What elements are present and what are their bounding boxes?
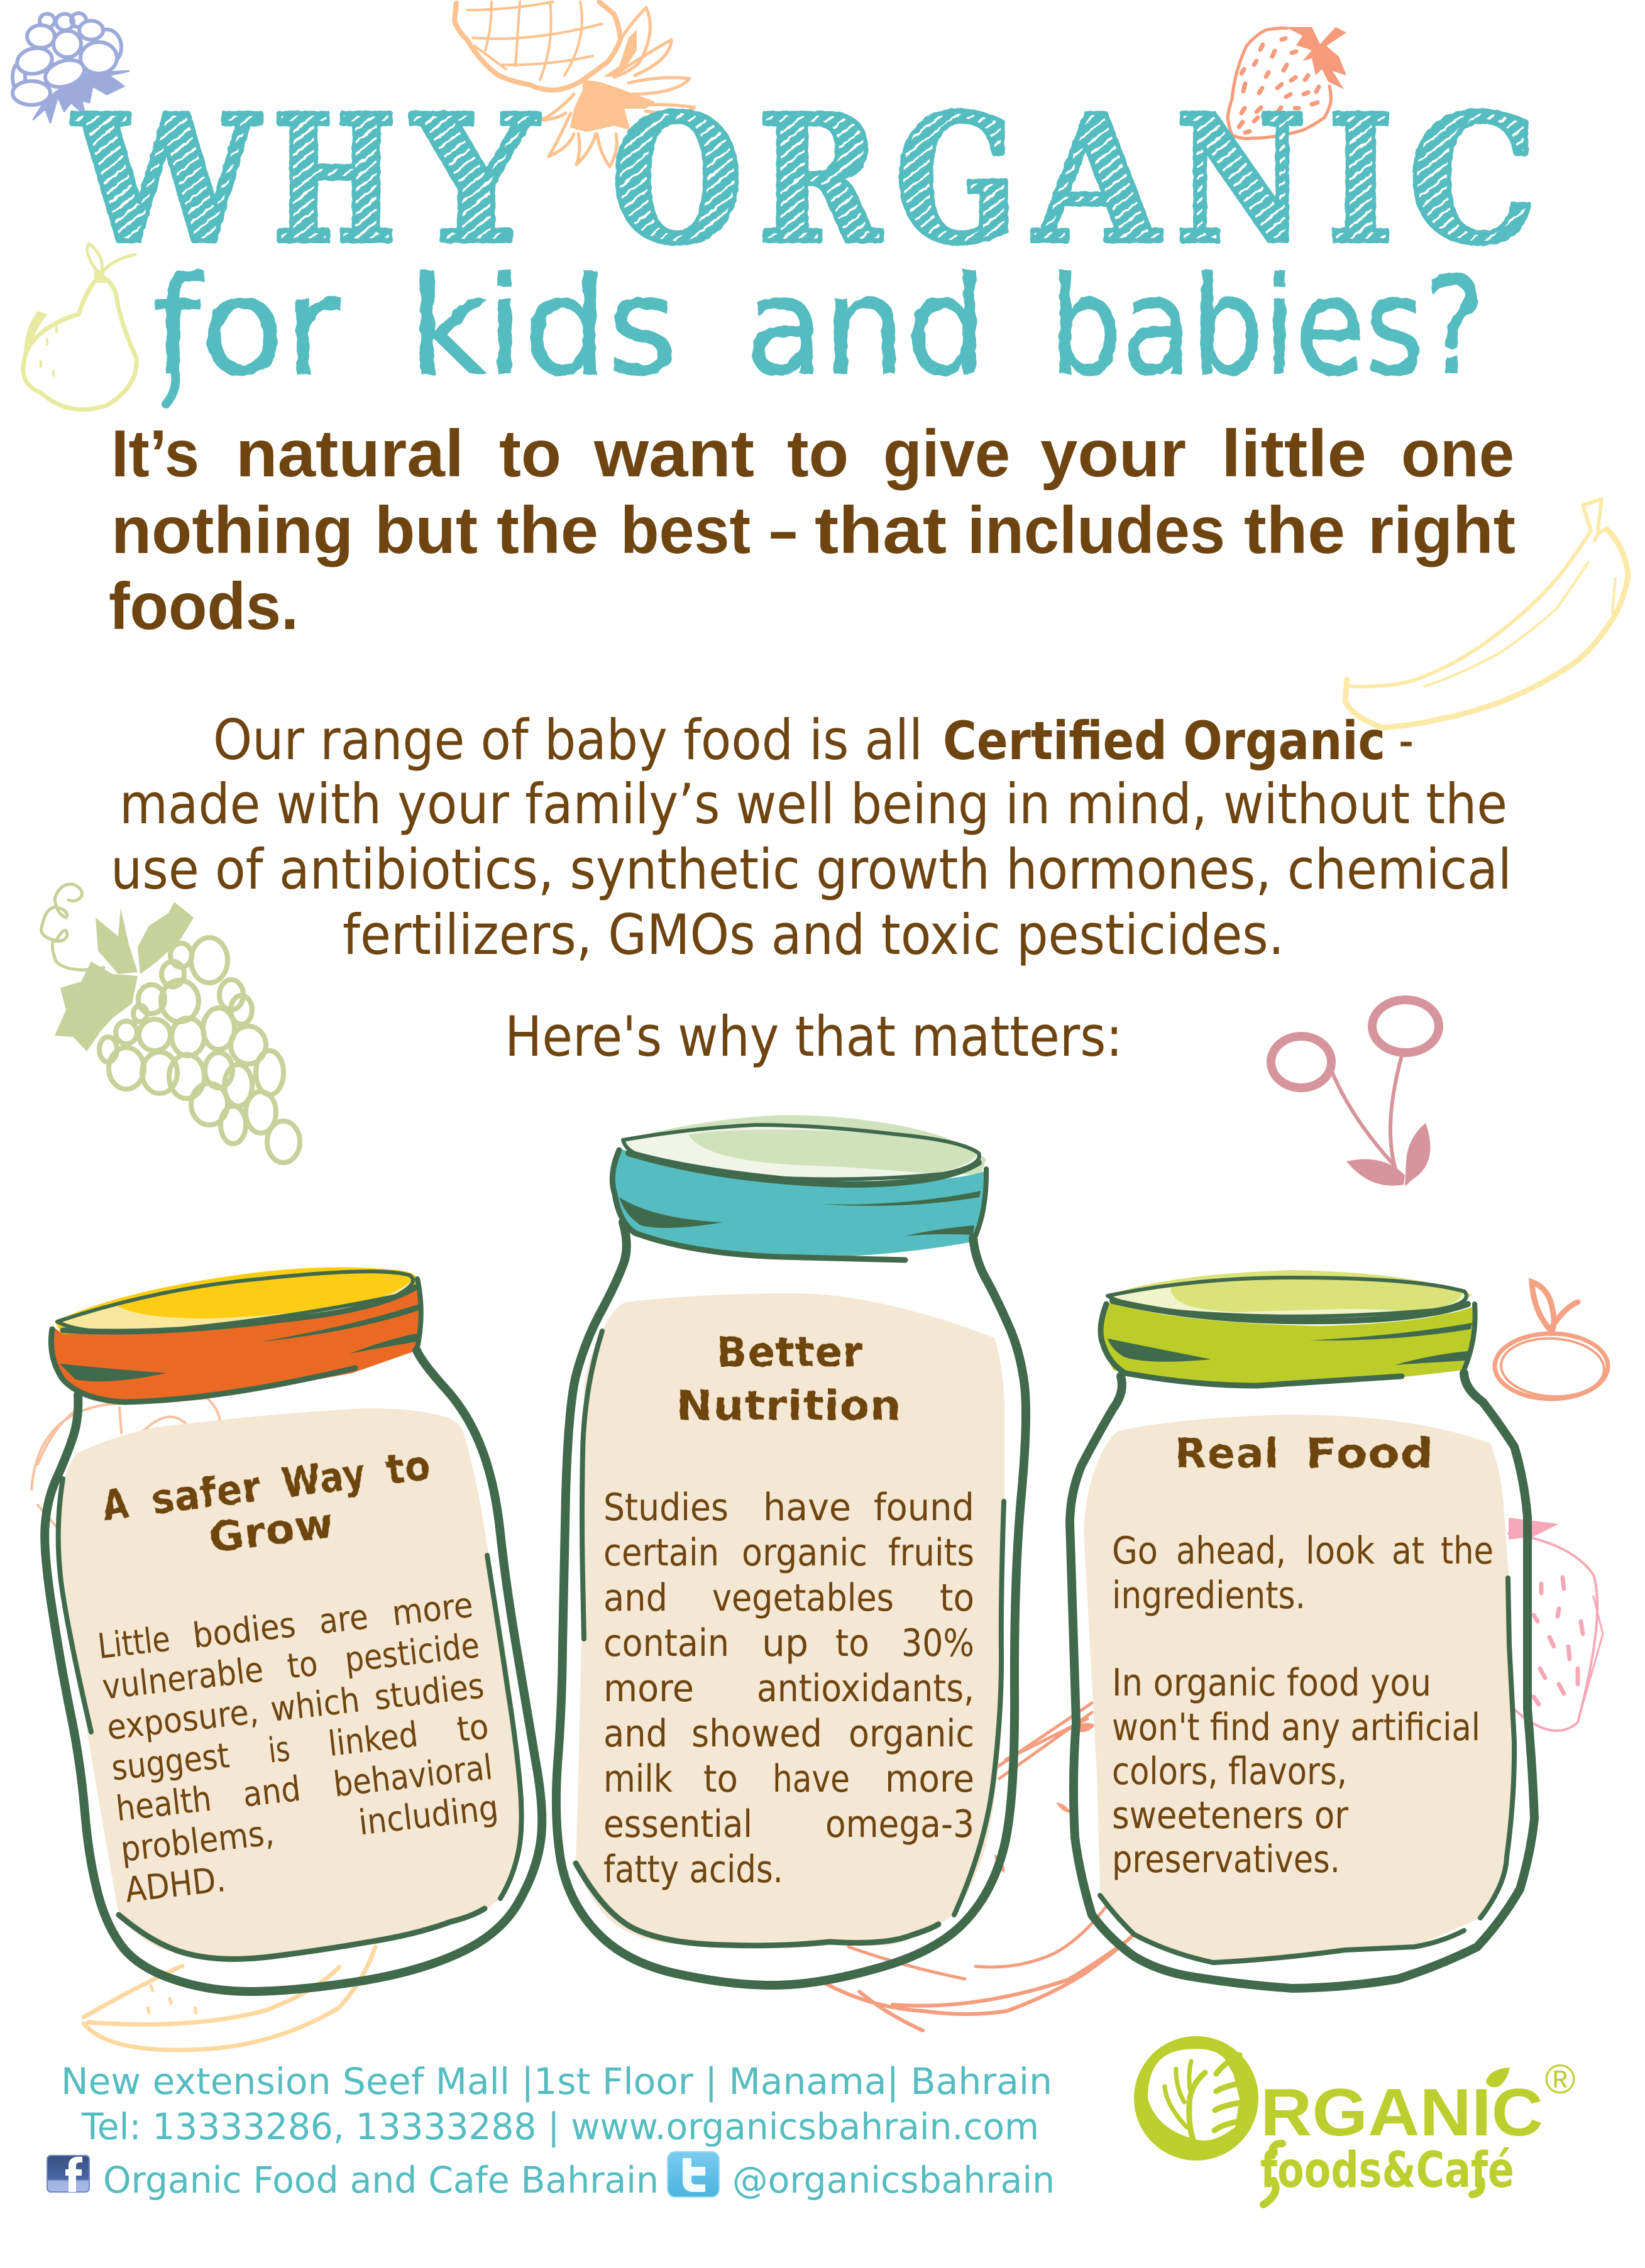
jar 2 body text: found bbox=[874, 1486, 974, 1530]
title: N bbox=[1175, 77, 1306, 282]
jar 1 body text: to bbox=[285, 1643, 320, 1687]
heading paragraph: want bbox=[593, 417, 754, 491]
jar 3 body text: at bbox=[1392, 1529, 1424, 1573]
jar 1 body text: studies bbox=[372, 1665, 486, 1717]
icon: orange bbox=[1495, 1282, 1608, 1399]
icon: grapes bbox=[41, 884, 300, 1163]
jar 2 body text: certain bbox=[603, 1531, 719, 1575]
jar 1 heading: safer bbox=[149, 1464, 264, 1524]
jar 1 body text: problems, bbox=[119, 1812, 276, 1870]
jar 1 body text: health bbox=[114, 1778, 213, 1829]
jar 2 body text: and bbox=[603, 1576, 668, 1620]
title: G bbox=[895, 77, 1018, 282]
intro paragraph bbox=[111, 708, 1512, 1069]
jar 2 body text: milk bbox=[603, 1757, 673, 1801]
heading paragraph: nothing bbox=[111, 493, 353, 567]
icon: facebook bbox=[47, 2156, 89, 2192]
jar 2 body text: to bbox=[940, 1576, 974, 1620]
jar 1 body text: pesticide bbox=[343, 1625, 481, 1680]
jar 2 body text: to bbox=[835, 1621, 869, 1665]
intro paragraph: made with your family’s well being in mind, without the bbox=[119, 772, 1507, 836]
jar 2 body text: 30% bbox=[901, 1621, 974, 1665]
jar 1 heading: A bbox=[100, 1480, 132, 1530]
jar 3 heading: Food bbox=[1306, 1430, 1434, 1477]
heading paragraph: right bbox=[1368, 493, 1516, 567]
jar 2 glass outline bbox=[556, 1222, 1026, 1985]
heading paragraph: includes bbox=[967, 493, 1225, 567]
icon: pear bbox=[23, 244, 136, 410]
heading paragraph: the bbox=[497, 493, 598, 567]
jar 2 body text: fatty acids. bbox=[603, 1848, 783, 1892]
jar 3 body text: sweeteners or bbox=[1112, 1794, 1348, 1838]
heading paragraph: foods. bbox=[109, 569, 299, 644]
jar 2 body text: showed bbox=[691, 1712, 822, 1756]
title: Y bbox=[410, 77, 541, 282]
footer contact text bbox=[61, 2060, 1055, 2201]
intro paragraph: - bbox=[1399, 708, 1414, 772]
jar 2 body text: contain bbox=[603, 1621, 729, 1665]
jar 1 heading: to bbox=[383, 1442, 434, 1494]
heading paragraph: to bbox=[499, 417, 561, 491]
jar 3 body text: colors, flavors, bbox=[1112, 1750, 1347, 1794]
jar 2 body text: organic bbox=[742, 1531, 867, 1575]
title: W bbox=[71, 77, 262, 282]
heading paragraph: little bbox=[1221, 417, 1367, 491]
jar 1 label panel bbox=[57, 1408, 520, 1963]
subtitle: kids bbox=[409, 248, 677, 405]
jar 3 body text: won't find any artificial bbox=[1112, 1706, 1480, 1750]
jar 3 body text: Go bbox=[1112, 1529, 1158, 1573]
jar 1 lid bbox=[51, 1267, 422, 1402]
jar 2: better nutrition bbox=[556, 1115, 1026, 1985]
jar 3 body text: preservatives. bbox=[1112, 1838, 1340, 1882]
title: H bbox=[273, 77, 397, 282]
jar 1 body text: suggest bbox=[109, 1735, 231, 1789]
heading paragraph: to bbox=[787, 417, 849, 491]
jar 1 heading bbox=[100, 1442, 439, 1575]
jar 1 body text: linked bbox=[326, 1714, 420, 1764]
jar 2 body text: organic bbox=[849, 1712, 974, 1756]
jar 1 body text: to bbox=[455, 1706, 490, 1750]
jar 1 body text: which bbox=[268, 1679, 361, 1729]
intro paragraph: fertilizers, GMOs and toxic pesticides. bbox=[343, 902, 1284, 967]
intro paragraph: Here's why that matters: bbox=[505, 1004, 1123, 1069]
jar 1 glass outline bbox=[45, 1350, 542, 1991]
jar 3 label panel bbox=[1084, 1415, 1514, 1963]
jar 2 body text: Studies bbox=[603, 1486, 729, 1530]
orange swirl between jars bbox=[817, 1703, 1134, 2030]
jar 1 body text: are bbox=[317, 1596, 370, 1641]
intro paragraph: Our range of baby food is all bbox=[213, 708, 923, 772]
jar 1 body text: bodies bbox=[190, 1604, 297, 1656]
title: R bbox=[757, 77, 883, 282]
jar 2 heading: Nutrition bbox=[676, 1383, 901, 1430]
heading paragraph: natural bbox=[236, 417, 464, 491]
jar 2 body text: antioxidants, bbox=[757, 1667, 974, 1711]
heading paragraph: that bbox=[815, 493, 947, 567]
heading paragraph: one bbox=[1401, 417, 1514, 491]
icon: banana bbox=[1345, 499, 1628, 728]
jar 2 lid bbox=[612, 1115, 986, 1260]
jar 2 body text: omega-3 bbox=[825, 1802, 974, 1846]
jar 2 label panel bbox=[576, 1293, 1004, 1946]
jar 2 heading bbox=[676, 1329, 901, 1430]
jar 1 heading: Grow bbox=[206, 1500, 337, 1562]
logo leaf bbox=[1486, 2068, 1510, 2087]
footer contact text: New extension Seef Mall |1st Floor | Manama| Bahrain bbox=[61, 2060, 1052, 2103]
logo tagline: foods&Café bbox=[1260, 2142, 1514, 2199]
fruit behind jar 1 bbox=[31, 1398, 220, 1527]
title: C bbox=[1408, 77, 1538, 282]
jar 3 body text: In organic food you bbox=[1112, 1661, 1431, 1705]
jar 1 heading: Way bbox=[279, 1450, 369, 1508]
footer contact text: Tel: 13333286, 13333288 | www.organicsbahrain.com bbox=[81, 2105, 1039, 2148]
jar 2 body text: fruits bbox=[888, 1531, 974, 1575]
heading paragraph: the bbox=[1244, 493, 1345, 567]
icon: blackberry bbox=[13, 13, 129, 123]
subtitle f tail bbox=[166, 371, 175, 404]
jar 2 body text: more bbox=[603, 1667, 694, 1711]
logo O with tree bbox=[1134, 2036, 1258, 2161]
icon: cherries bbox=[1271, 1000, 1439, 1186]
icon: strawberry top right bbox=[1228, 27, 1346, 138]
jar 2 body text: have bbox=[773, 1757, 850, 1801]
jar 2 heading: Better bbox=[717, 1329, 863, 1376]
heading paragraph: It’s bbox=[111, 417, 199, 491]
subtitle: babies? bbox=[1050, 248, 1485, 405]
subtitle: for bbox=[152, 248, 341, 405]
jar 1 body text: and bbox=[241, 1768, 303, 1815]
footer contact text: Organic Food and Cafe Bahrain bbox=[103, 2159, 659, 2201]
logo: Organic Foods & Cafe bbox=[1134, 2036, 1575, 2205]
jar 2 body text: vegetables bbox=[712, 1576, 894, 1620]
jar 3 body text: the bbox=[1441, 1529, 1494, 1573]
jar 2 body text: more bbox=[885, 1757, 974, 1801]
jar 1 body text: including bbox=[356, 1787, 500, 1843]
heading paragraph: give bbox=[883, 417, 1010, 491]
jar 3 lid bbox=[1100, 1270, 1475, 1386]
jar 1 body text: more bbox=[390, 1584, 475, 1633]
logo f tails bbox=[1263, 2144, 1482, 2205]
jar 1: a safer way to grow bbox=[45, 1267, 542, 1991]
logo registered mark: ® bbox=[1545, 2056, 1575, 2102]
jar 3: real food bbox=[1070, 1270, 1534, 1988]
heading paragraph bbox=[109, 417, 1516, 644]
jar 1 body text bbox=[96, 1584, 505, 1910]
jar 2 body text: essential bbox=[603, 1802, 752, 1846]
intro paragraph: use of antibiotics, synthetic growth hormones, chemical bbox=[111, 837, 1512, 902]
heading paragraph: but bbox=[375, 493, 478, 567]
footer contact text: @organicsbahrain bbox=[732, 2159, 1055, 2201]
jar 3 glass outline bbox=[1070, 1373, 1534, 1988]
heading paragraph: best bbox=[620, 493, 751, 567]
intro paragraph: Certified Organic bbox=[943, 710, 1385, 772]
jar 1 body text: vulnerable bbox=[101, 1649, 265, 1707]
icon: twitter bbox=[668, 2152, 719, 2197]
melon behind jar 1 bbox=[84, 1947, 375, 2050]
icon: pineapple bbox=[454, 2, 695, 167]
title: I bbox=[1328, 77, 1394, 282]
title: O bbox=[611, 77, 743, 282]
jar 3 heading: Real bbox=[1175, 1430, 1279, 1477]
jar 1 body text: Little bbox=[96, 1618, 172, 1667]
jar 3 body text: ahead, bbox=[1176, 1529, 1286, 1573]
heading paragraph: your bbox=[1040, 417, 1186, 491]
jar 2 body text: have bbox=[763, 1486, 851, 1530]
jar 1 body text: ADHD. bbox=[123, 1859, 228, 1910]
heading paragraph: – bbox=[769, 493, 797, 567]
jar 2 body text: up bbox=[762, 1621, 808, 1665]
jar 1 body text: is bbox=[266, 1728, 292, 1771]
jar 3 body text: ingredients. bbox=[1112, 1574, 1306, 1618]
jar 1 body text: behavioral bbox=[331, 1747, 495, 1805]
jar 3 body text: look bbox=[1306, 1529, 1375, 1573]
strawberry behind jar 3 bbox=[1509, 1518, 1603, 1731]
jar 2 body text: to bbox=[703, 1757, 738, 1801]
jar 1 body text: exposure, bbox=[105, 1691, 260, 1748]
logo wordmark: RGANIC bbox=[1260, 2074, 1543, 2150]
title: A bbox=[1031, 77, 1163, 282]
jar 3 body text bbox=[1112, 1529, 1494, 1882]
jar 2 body text: and bbox=[603, 1712, 668, 1756]
jar 2 body text bbox=[603, 1486, 974, 1892]
subtitle: and bbox=[745, 248, 987, 405]
